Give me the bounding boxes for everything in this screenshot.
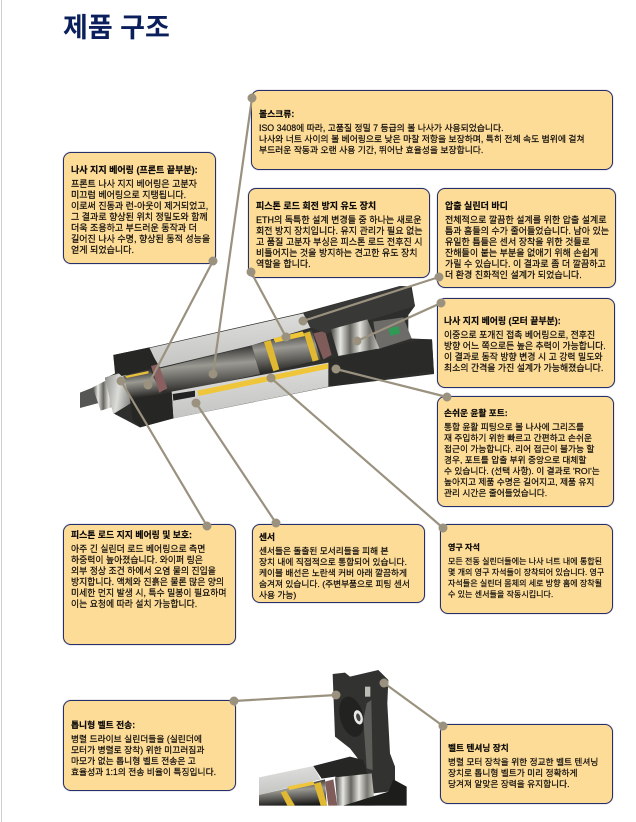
body text: ISO 3408에 따라, 고품질 정밀 7 등급의 볼 나사가 사용되었습니다.	[259, 123, 504, 133]
heading: 나사 지지 베어링 (모터 끝부분):	[444, 316, 561, 326]
body text	[448, 757, 598, 789]
body text: 케이블 배선은 노란색 커버 아래 깔끔하게	[259, 568, 407, 578]
body text: 이 결과로 동작 방향 변경 시 고 강력 밀도와	[444, 352, 603, 362]
arrow: cylinder body leader	[300, 274, 442, 324]
panel: extruded cylinder body	[437, 188, 616, 288]
body text: 이중으로 포개진 접촉 베어링으로, 전후진	[444, 330, 595, 340]
heading: 영구 자석	[448, 543, 480, 552]
body text	[256, 215, 423, 269]
body text: 아주 긴 실린더 로드 베어링으로 측면	[71, 544, 205, 554]
heading: 나사 지지 베어링 (프론트 끝부분):	[71, 165, 198, 175]
body text	[445, 215, 609, 280]
arrow: timing belt leader	[231, 692, 339, 704]
heading: 벨트 텐셔닝 장치	[448, 743, 509, 753]
body text: 틈과 홈들의 수가 줄어들었습니다. 남아 있는	[445, 226, 609, 236]
body text	[71, 179, 210, 255]
body text: 모든 전동 실린더들에는 나사 너트 내에 통합된	[448, 557, 602, 566]
body text: 당겨져 알맞은 장력을 유지합니다.	[448, 779, 570, 789]
arrow: belt tensioner leader	[381, 680, 446, 729]
body text: 효율성과 1:1의 전송 비율이 특징입니다.	[71, 767, 216, 777]
body text: 프론트 나사 지지 베어링은 고분자	[71, 179, 197, 189]
arrow: front screw bearing leader	[145, 258, 216, 388]
body text: 몇 개의 영구 자석들이 장착되어 있습니다. 영구	[448, 568, 604, 577]
body text: 경우, 포트를 압출 부위 중앙으로 대체할	[444, 455, 586, 465]
body text: 나사와 너트 사이의 볼 베어링으로 낮은 마찰 저항을 보장하며, 특히 전체 속도 범위에 걸쳐	[259, 134, 585, 144]
panel: belt tensioning device	[440, 724, 613, 804]
body text	[259, 546, 410, 600]
body text: 장치로 톱니형 벨트가 미리 정확하게	[448, 768, 578, 778]
body text: 센서들은 돌출된 모서리들을 피해 본	[259, 546, 389, 556]
body text	[259, 123, 585, 155]
body text: 외부 정상 조건 하에서 오염 물의 진입을	[71, 566, 216, 576]
arrow: lubrication port leader	[333, 366, 450, 400]
body text: 이로써 진동과 런-아웃이 제거되었고,	[71, 201, 208, 211]
body text: 회전 방지 장치입니다. 유지 관리가 필요 없는	[256, 226, 423, 236]
body text: 숨겨져 있습니다. (주변부품으로 피팅 센서	[259, 579, 410, 589]
body text	[444, 330, 606, 373]
body text: 모터가 병렬로 장착) 위한 미끄러짐과	[71, 745, 204, 755]
panel: piston rod anti-rotation guide	[248, 188, 430, 278]
body text: 길어진 나사 수명, 향상된 동적 성능을	[71, 234, 210, 244]
body text: 수 있습니다. (선택 사항). 이 결과로 'ROI'는	[444, 466, 600, 476]
body text	[444, 422, 600, 498]
body text: ETH의 독특한 설계 변경들 중 하나는 새로운	[256, 215, 421, 225]
panel: permanent magnet	[440, 524, 613, 614]
heading: 손쉬운 윤활 포트:	[444, 408, 508, 418]
body text: 병렬 모터 장착을 위한 정교한 벨트 텐셔닝	[448, 757, 598, 767]
body text: 그 결과로 향상된 위치 정밀도와 함께	[71, 212, 208, 222]
body text: 통합 윤활 피팅으로 볼 나사에 그리즈를	[444, 422, 584, 432]
body text	[448, 557, 604, 599]
body text: 방지합니다. 액체와 진흙은 물론 많은 양의	[71, 577, 224, 587]
body text: 이는 요청에 따라 설치 가능합니다.	[71, 599, 197, 609]
arrow: anti-rotation leader	[248, 269, 289, 340]
body text: 관리 시간은 줄어들었습니다.	[444, 488, 547, 498]
body text: 수 있는 센서들을 작동시킵니다.	[448, 590, 553, 599]
body text: 고 품질 고분자 부싱은 피스톤 로드 전후진 시	[256, 237, 423, 247]
panel: screw support bearing (front end)	[63, 152, 216, 264]
panel: ball screw	[251, 90, 613, 170]
arrow: piston rod bearing leader	[118, 378, 210, 529]
body text: 방향 어느 쪽으로든 높은 추력이 가능합니다.	[444, 341, 606, 351]
body text: 미끄럼 베어링으로 지탱됩니다.	[71, 190, 186, 200]
body text: 전체적으로 깔끔한 설계를 위한 압출 설계로	[445, 215, 607, 225]
body text: 자석들은 실린더 몸체의 세로 방향 홈에 장착될	[448, 579, 602, 588]
panel: screw support bearing (motor end)	[437, 298, 615, 388]
body text: 유일한 틈들은 센서 장착을 위한 것들로	[445, 237, 590, 247]
heading: 피스톤 로드 회전 방지 유도 장치	[256, 201, 376, 211]
body text: 더욱 조용하고 부드러운 동작과 더	[71, 223, 197, 233]
body text: 사용 가능)	[259, 590, 296, 600]
arrow: ball screw leader	[210, 95, 255, 377]
body text: 부드러운 작동과 오랜 사용 기간, 뛰어난 효율성을 보장합니다.	[259, 145, 483, 155]
body text: 더 환경 친화적인 설계가 되었습니다.	[445, 270, 582, 280]
body text: 잔해들이 붙는 부분을 없애기 위해 손쉽게	[445, 248, 598, 258]
body text: 미세한 먼지 발생 시, 특수 밀봉이 필요하며	[71, 588, 227, 598]
panel: piston rod support bearing and protection	[63, 524, 236, 645]
title: 제품 구조	[63, 13, 170, 43]
silhouette backing	[105, 286, 434, 427]
arrow: magnet leader	[268, 375, 446, 531]
body text: 재 주입하기 위한 빠르고 간편하고 손쉬운	[444, 433, 592, 443]
body text: 접근이 가능합니다. 리어 접근이 불가능 할	[444, 444, 594, 454]
body text: 병렬 드라이브 실린더들을 (실린더에	[71, 734, 202, 744]
body text	[71, 544, 227, 609]
body text: 마모가 없는 톱니형 벨트 전송은 고	[71, 756, 196, 766]
heading: 볼스크류:	[259, 109, 294, 119]
body text: 얻게 되었습니다.	[71, 245, 134, 255]
heading: 센서	[259, 532, 275, 542]
body text: 장치 내에 직접적으로 통합되어 있습니다.	[259, 557, 407, 567]
panel: sensors	[252, 524, 425, 603]
panel: easy lubrication port	[437, 396, 614, 507]
heading: 피스톤 로드 지지 베어링 및 보호:	[71, 530, 192, 540]
body text	[71, 734, 216, 777]
heading: 톱니형 벨트 전송:	[71, 720, 135, 730]
panel: timing belt transmission	[63, 700, 236, 791]
body text: 최소의 간격을 가진 설계가 가능해졌습니다.	[444, 363, 603, 373]
body text: 역할을 합니다.	[256, 259, 311, 269]
arrow: motor end bearing leader	[354, 300, 444, 344]
body text: 하중력이 높아졌습니다. 와이퍼 링은	[71, 555, 203, 565]
body text: 높아지고 제품 수명은 길어지고, 제품 유지	[444, 477, 594, 487]
body text: 가릴 수 있습니다. 이 결과로 좀 더 깔끔하고	[445, 259, 606, 269]
body text: 비틀어지는 것을 방지하는 견고한 유도 장치	[256, 248, 418, 258]
arrow: sensor leader	[193, 400, 279, 526]
heading: 압출 실린더 바디	[445, 201, 508, 211]
